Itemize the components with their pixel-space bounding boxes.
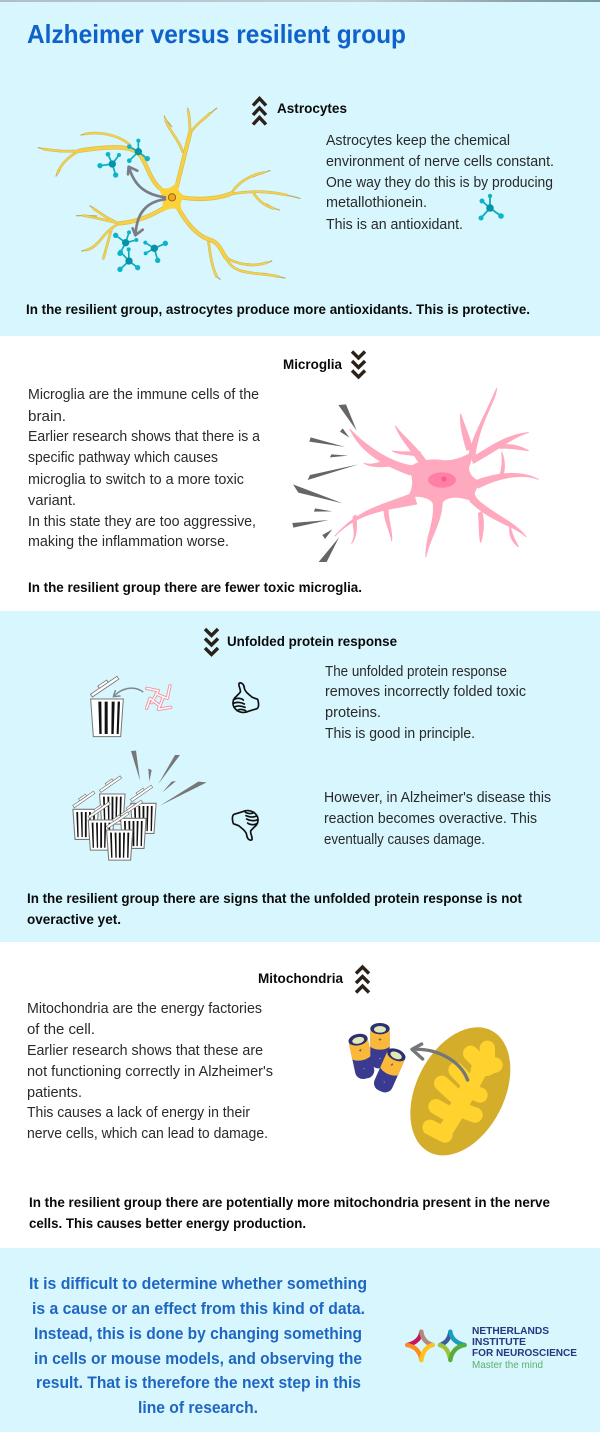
icon: thumbs down [232, 811, 258, 840]
text: mitochondria description: of the cell. [27, 1022, 95, 1038]
text: microglia description: In this state they are too aggressive, [28, 514, 256, 530]
icon: three up chevrons [253, 98, 266, 124]
summary: mitochondria [29, 1194, 550, 1231]
panel: astrocytes [0, 0, 600, 336]
text: astrocytes description: This is an antioxidant. [326, 217, 463, 233]
text: microglia description [28, 387, 261, 550]
text: microglia description: Earlier research shows that there is a [28, 429, 261, 445]
text: unfolded protein response overactive: eventually causes damage. [324, 832, 485, 848]
icon: thumbs up [233, 683, 259, 712]
panel: microglia [0, 336, 600, 611]
heading: astrocytes: Astrocytes [277, 100, 347, 116]
summary: mitochondria: cells. This causes better energy production. [29, 1215, 306, 1231]
text: microglia description: variant. [28, 493, 76, 509]
text: microglia description: Microglia are the immune cells of the [28, 387, 259, 403]
text: unfolded protein response overactive: reaction becomes overactive. This [324, 811, 537, 827]
icon: three up chevrons [356, 967, 369, 992]
icon: three down chevrons [352, 352, 365, 377]
text: conclusion: Instead, this is done by changing something [34, 1325, 362, 1343]
heading: unfolded protein response: Unfolded protein response [227, 633, 397, 649]
logo: Netherlands Institute for Neuroscience [407, 1325, 577, 1371]
summary: unfolded protein response: In the resilient group there are signs that the unfolded protein response is not [27, 890, 522, 906]
summary: mitochondria: In the resilient group there are potentially more mitochondria present in the nerve [29, 1194, 550, 1210]
icon: three down chevrons [205, 629, 218, 654]
title: Alzheimer versus resilient group [27, 19, 406, 49]
panel: unfolded protein response [0, 611, 600, 942]
text: mitochondria description: Mitochondria are the energy factories [27, 1001, 262, 1017]
summary: unfolded protein response: overactive yet. [27, 911, 121, 927]
summary: microglia: In the resilient group there are fewer toxic microglia. [28, 579, 362, 595]
text: microglia description: specific pathway which causes [28, 450, 218, 466]
text: astrocytes description [326, 133, 554, 233]
text: unfolded protein response good: proteins. [325, 705, 381, 721]
text: unfolded protein response good [325, 664, 526, 742]
text: unfolded protein response good: removes incorrectly folded toxic [325, 684, 526, 700]
text: microglia description: making the inflammation worse. [28, 534, 229, 550]
heading: mitochondria: Mitochondria [258, 970, 343, 986]
text: unfolded protein response good: The unfolded protein response [325, 664, 507, 680]
panel: conclusion [0, 1248, 600, 1432]
text: unfolded protein response good: This is good in principle. [325, 726, 475, 742]
logo: Netherlands Institute for Neuroscience: NETHERLANDS [472, 1325, 549, 1337]
text: unfolded protein response overactive [324, 790, 551, 848]
illustration: mitochondrion producing batteries [347, 1010, 531, 1172]
text: conclusion: line of research. [138, 1399, 258, 1417]
text: conclusion: in cells or mouse models, and observing the [34, 1350, 362, 1368]
text: conclusion [29, 1275, 367, 1417]
summary: unfolded protein response [27, 890, 522, 927]
text: conclusion: is a cause or an effect from this kind of data. [32, 1300, 365, 1318]
text: astrocytes description: Astrocytes keep the chemical [326, 133, 510, 149]
logo: Netherlands Institute for Neuroscience: Master the mind [472, 1359, 543, 1371]
text: conclusion: result. That is therefore the next step in this [36, 1374, 361, 1392]
logo: Netherlands Institute for Neuroscience: FOR NEUROSCIENCE [472, 1347, 577, 1359]
text: mitochondria description [27, 1001, 273, 1142]
icon: antioxidant molecule [478, 194, 504, 220]
heading: microglia: Microglia [283, 356, 342, 372]
text: astrocytes description: environment of nerve cells constant. [326, 154, 554, 170]
illustration: overflowing bins [72, 751, 207, 860]
panel: mitochondria [0, 942, 600, 1248]
text: microglia description: brain. [28, 409, 66, 425]
illustration: toxic microglia cell [292, 388, 538, 562]
text: microglia description: microglia to switch to a more toxic [28, 472, 244, 488]
logo: Netherlands Institute for Neuroscience: INSTITUTE [472, 1336, 526, 1348]
text: astrocytes description: metallothionein. [326, 195, 427, 211]
text: mitochondria description: nerve cells, which can lead to damage. [27, 1126, 268, 1142]
text: mitochondria description: Earlier research shows that these are [27, 1043, 263, 1059]
illustration: bin with misfolded protein [89, 674, 171, 737]
illustration: astrocyte producing antioxidants [38, 108, 300, 279]
summary: astrocytes: In the resilient group, astrocytes produce more antioxidants. This is protective. [26, 301, 530, 317]
text: mitochondria description: patients. [27, 1085, 82, 1101]
text: mitochondria description: This causes a lack of energy in their [27, 1105, 250, 1121]
text: astrocytes description: One way they do this is by producing [326, 175, 553, 191]
text: mitochondria description: not functioning correctly in Alzheimer's [27, 1064, 273, 1080]
text: conclusion: It is difficult to determine whether something [29, 1275, 367, 1293]
text: unfolded protein response overactive: However, in Alzheimer's disease this [324, 790, 551, 806]
